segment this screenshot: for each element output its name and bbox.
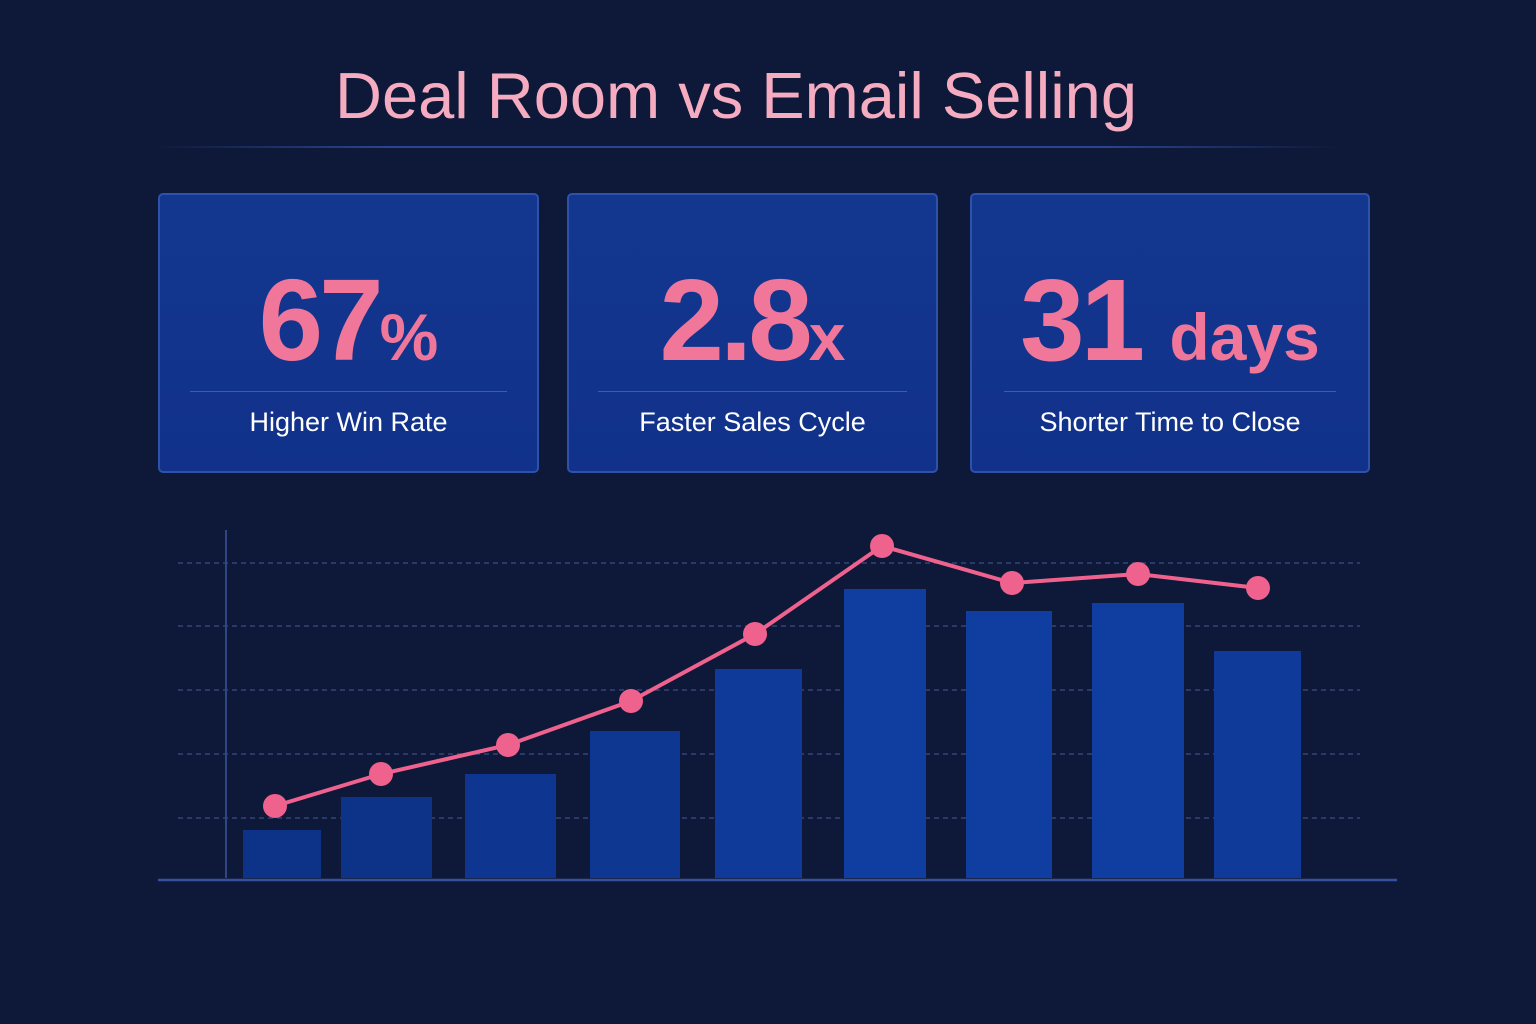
title: Deal Room vs Email Selling [335,59,1137,132]
label: sales cycle: Faster Sales Cycle [639,407,866,437]
card: win rate [158,193,539,473]
label: time to close: Shorter Time to Close [1039,407,1301,437]
card: time to close [970,193,1370,473]
stat: 2.8x: 2.8x [660,255,845,385]
stat: 67%: 67% [259,255,438,385]
label: win rate: Higher Win Rate [249,407,448,437]
stat: 31 days: 31 days [1020,255,1320,385]
card: sales cycle [567,193,938,473]
